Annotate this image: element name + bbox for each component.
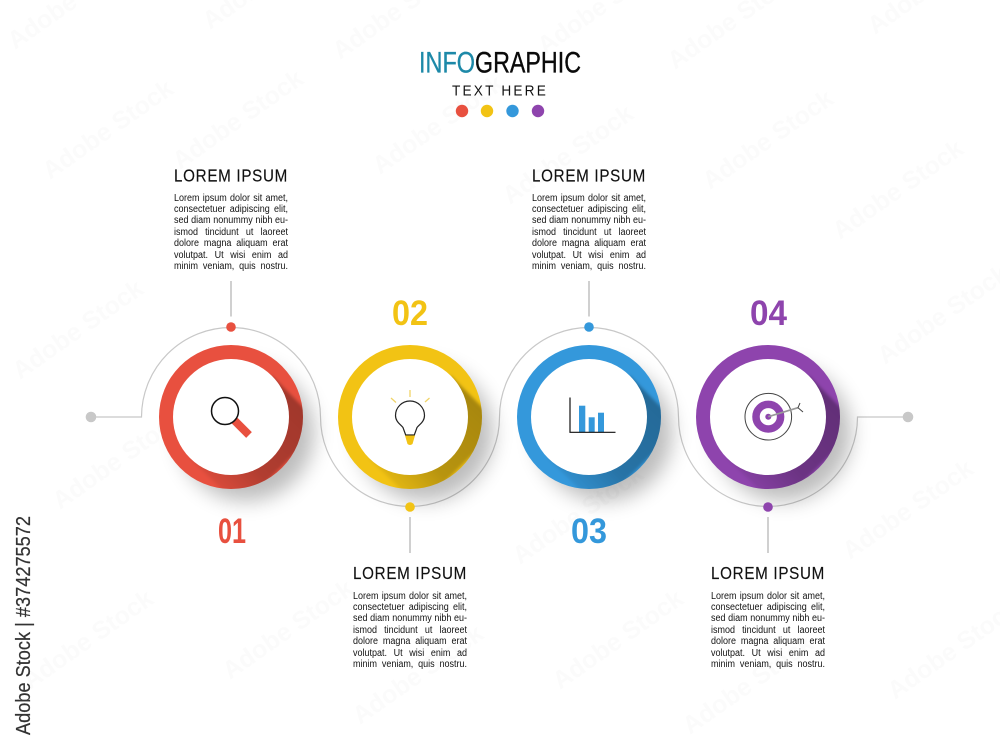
body text 2: sed diam nonummy nibh eu- (353, 613, 467, 624)
body text 4 (711, 590, 825, 670)
timeline path (86, 328, 913, 506)
stock credit: Adobe Stock | #374275572 (13, 516, 35, 735)
body text 1: dolore magna aliquam erat (174, 238, 288, 249)
body text 4: sed diam nonummy nibh eu- (711, 613, 825, 624)
heading 4: LOREM IPSUM (711, 563, 825, 583)
watermark: Adobe Stock (217, 574, 359, 685)
body text 2: Lorem ipsum dolor sit amet, (353, 590, 467, 602)
step 1 connector (226, 281, 236, 332)
body text 1: volutpat. Ut wisi enim ad (174, 250, 288, 261)
title: GRAPHIC (475, 46, 581, 80)
body text 1: ismod tincidunt ut laoreet (174, 227, 288, 238)
icon: light bulb (391, 390, 430, 445)
body text 2: ismod tincidunt ut laoreet (353, 625, 467, 636)
body text 3: Lorem ipsum dolor sit amet, (532, 192, 646, 204)
number 01: 01 (218, 512, 246, 551)
watermark: Adobe Stock (547, 584, 689, 695)
body text 1: consectetuer adipiscing elit, (174, 204, 288, 215)
watermark: Adobe Stock (697, 84, 839, 195)
body text 4: volutpat. Ut wisi enim ad (711, 648, 825, 659)
body text 1 (174, 192, 288, 272)
heading 1: LOREM IPSUM (174, 166, 288, 186)
body text 1: Lorem ipsum dolor sit amet, (174, 192, 288, 204)
body text 2: consectetuer adipiscing elit, (353, 602, 467, 613)
watermark: Adobe Stock (37, 74, 179, 185)
icon: target (745, 393, 803, 440)
title: INFO (419, 46, 475, 80)
body text 2: dolore magna aliquam erat (353, 636, 467, 647)
step 1 circle (159, 345, 322, 508)
step 3 connector (584, 281, 594, 332)
body text 1: minim veniam, quis nostru. (174, 261, 288, 272)
body text 1: sed diam nonummy nibh eu- (174, 215, 288, 226)
body text 4: Lorem ipsum dolor sit amet, (711, 590, 825, 602)
body text 2 (353, 590, 467, 670)
body text 3 (532, 192, 646, 272)
body text 3: volutpat. Ut wisi enim ad (532, 250, 646, 261)
watermark: Adobe Stock (827, 134, 969, 245)
icon: bar chart (570, 398, 616, 432)
number 02: 02 (392, 294, 428, 333)
step 2 circle (338, 345, 501, 508)
step 4 circle (696, 345, 859, 508)
step 3 circle (517, 345, 680, 508)
body text 4: ismod tincidunt ut laoreet (711, 625, 825, 636)
body text 3: ismod tincidunt ut laoreet (532, 227, 646, 238)
heading 2: LOREM IPSUM (353, 563, 467, 583)
watermark: Adobe Stock (7, 274, 149, 385)
watermark: Adobe Stock (47, 404, 189, 515)
title (419, 46, 581, 80)
watermark: Adobe Stock (347, 619, 489, 730)
watermark: Adobe Stock (167, 64, 309, 175)
watermark: Adobe Stock (367, 69, 509, 180)
watermark: Adobe Stock (497, 99, 639, 210)
body text 4: consectetuer adipiscing elit, (711, 602, 825, 613)
heading 3: LOREM IPSUM (532, 166, 646, 186)
watermark: Adobe Stock (837, 454, 979, 565)
body text 3: dolore magna aliquam erat (532, 238, 646, 249)
number 04: 04 (750, 294, 788, 333)
body text 2: minim veniam, quis nostru. (353, 659, 467, 670)
body text 3: consectetuer adipiscing elit, (532, 204, 646, 215)
body text 2: volutpat. Ut wisi enim ad (353, 648, 467, 659)
title dots (456, 105, 544, 117)
icon: magnifier (212, 398, 249, 435)
body text 3: minim veniam, quis nostru. (532, 261, 646, 272)
number 03: 03 (571, 512, 607, 551)
watermark: Adobe Stock (17, 584, 159, 695)
watermark: Adobe Stock (677, 629, 819, 740)
step 2 connector (405, 502, 415, 553)
body text 3: sed diam nonummy nibh eu- (532, 215, 646, 226)
body text 4: dolore magna aliquam erat (711, 636, 825, 647)
subtitle: TEXT HERE (452, 82, 548, 100)
step 4 connector (763, 502, 773, 553)
body text 4: minim veniam, quis nostru. (711, 659, 825, 670)
watermark: Adobe Stock (507, 459, 649, 570)
